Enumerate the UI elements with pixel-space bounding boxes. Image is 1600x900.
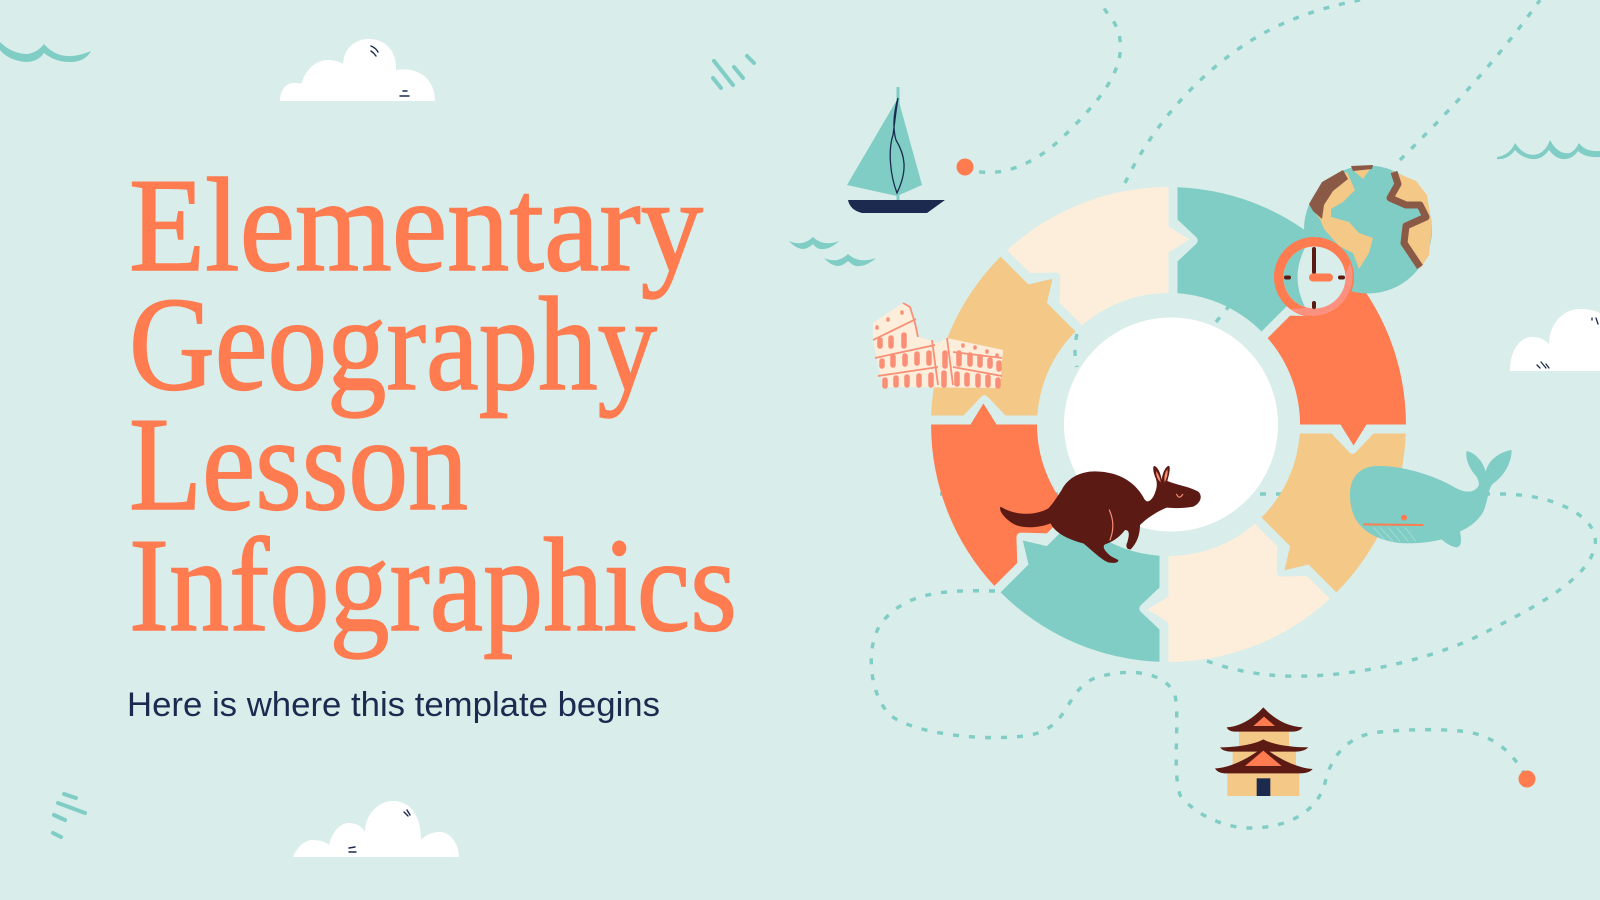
segment 3 peach: [1262, 434, 1406, 592]
cloud top left: [280, 39, 435, 101]
title: Elementary: [129, 151, 703, 299]
cloud right: [1510, 309, 1600, 371]
wave top left: [0, 42, 91, 62]
route start dot: [956, 158, 974, 176]
title: Lesson: [129, 390, 468, 538]
icon: whale: [1350, 450, 1512, 547]
ring centre: [1064, 318, 1278, 532]
title: Infographics: [129, 511, 737, 659]
waves by boat: [789, 237, 876, 266]
segment 4 cream: [1116, 497, 1330, 711]
segment 7 peach: [931, 257, 1076, 416]
title: Geography: [129, 270, 657, 418]
icon: kangaroo: [1000, 466, 1201, 563]
segment 5 teal: [1001, 518, 1160, 662]
segmented ring: [882, 138, 1455, 711]
cloud bottom: [293, 801, 459, 857]
segment 6 orange: [882, 372, 1096, 586]
icon: sailboat: [847, 87, 945, 213]
icon: clock: [1274, 237, 1354, 317]
title: [129, 151, 737, 659]
tick marks bottom left: [53, 794, 85, 837]
subtitle: Here is where this template begins: [127, 686, 660, 724]
icon: globe: [1304, 165, 1432, 294]
route end dot: [1518, 770, 1536, 788]
segment 2 orange: [1241, 263, 1455, 477]
wave top right: [1497, 140, 1600, 159]
dashed routes: [871, 0, 1595, 828]
icon: pagoda: [1215, 707, 1313, 796]
tick marks top: [713, 56, 754, 88]
segment 8 cream: [1007, 138, 1221, 352]
icon: colosseum: [873, 303, 1003, 388]
segment 1 teal: [1178, 187, 1336, 332]
